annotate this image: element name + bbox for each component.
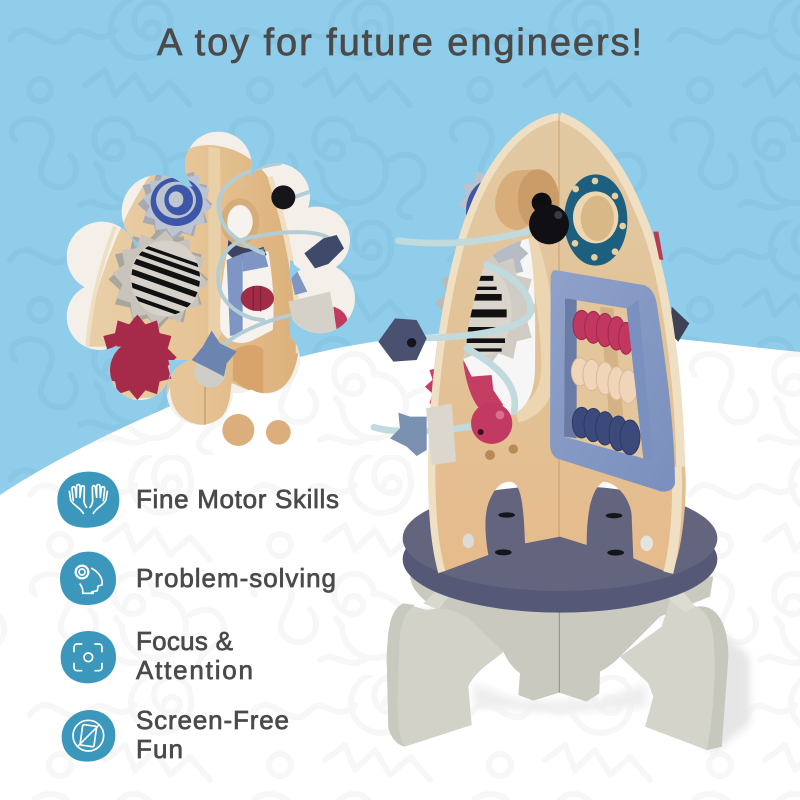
icon: hands bbox=[57, 472, 119, 528]
wood silhouette bbox=[428, 115, 686, 573]
close-up striped gear bbox=[108, 230, 208, 329]
gears behind body bbox=[425, 167, 689, 420]
icon: no screen bbox=[62, 710, 115, 762]
icon: focus frame bbox=[61, 631, 116, 683]
label: problem-solving: Problem-solving bbox=[136, 563, 336, 593]
main rocket body bbox=[374, 115, 689, 573]
screw holes bbox=[463, 444, 653, 551]
close-up red gear bbox=[98, 315, 177, 400]
skill labels bbox=[136, 484, 339, 764]
close-up wire bbox=[218, 163, 335, 350]
skill icons bbox=[57, 472, 119, 762]
close-up navy nut bbox=[304, 235, 344, 268]
label: focus and attention: Focus & bbox=[136, 626, 233, 656]
close-up wood body bbox=[87, 145, 298, 425]
icon: head with gear bbox=[60, 552, 116, 605]
centre seam bbox=[557, 117, 560, 537]
wood peg tube bbox=[495, 169, 559, 230]
right leg bbox=[620, 590, 728, 750]
purple disc bbox=[403, 486, 717, 613]
label: screen-free fun: Fun bbox=[136, 734, 183, 764]
grey cube bead bbox=[426, 403, 456, 465]
label: screen-free fun bbox=[136, 705, 289, 764]
rocket lower body bbox=[410, 577, 713, 702]
thought cloud with close-up of toy bbox=[66, 132, 355, 446]
see-through hole with striped gear bbox=[463, 238, 536, 415]
navy nut bead bbox=[378, 318, 427, 362]
close-up grey cube bbox=[288, 292, 336, 334]
plywood edges bbox=[432, 117, 681, 573]
label: fine motor skills: Fine Motor Skills bbox=[136, 484, 339, 514]
blue star bead bbox=[390, 413, 427, 456]
left leg bbox=[387, 590, 503, 747]
bead wire bbox=[374, 227, 545, 431]
close-up black bead bbox=[271, 185, 295, 209]
rocket base and legs bbox=[387, 486, 750, 753]
red mark on edge bbox=[653, 232, 663, 260]
centre seam bbox=[558, 610, 561, 693]
cream beads bbox=[571, 358, 638, 403]
ground shadow bbox=[473, 633, 750, 753]
navy beads bbox=[572, 407, 640, 455]
close-up central opening bbox=[220, 247, 274, 343]
white curved ground bbox=[0, 329, 800, 800]
peg holes bbox=[495, 512, 624, 556]
label: focus and attention bbox=[136, 626, 253, 685]
porthole bbox=[564, 174, 627, 266]
pink bead bbox=[471, 403, 512, 444]
close-up small gear bbox=[138, 172, 212, 240]
close-up blue star bead bbox=[192, 331, 237, 388]
label: focus and attention: Attention bbox=[136, 655, 253, 685]
thought dots bbox=[222, 414, 291, 446]
red beads bbox=[573, 310, 633, 354]
title: A toy for future engineers! bbox=[157, 22, 642, 64]
label: screen-free fun: Screen-Free bbox=[136, 705, 289, 735]
black bead bbox=[529, 204, 569, 244]
abacus frame bbox=[550, 270, 675, 492]
